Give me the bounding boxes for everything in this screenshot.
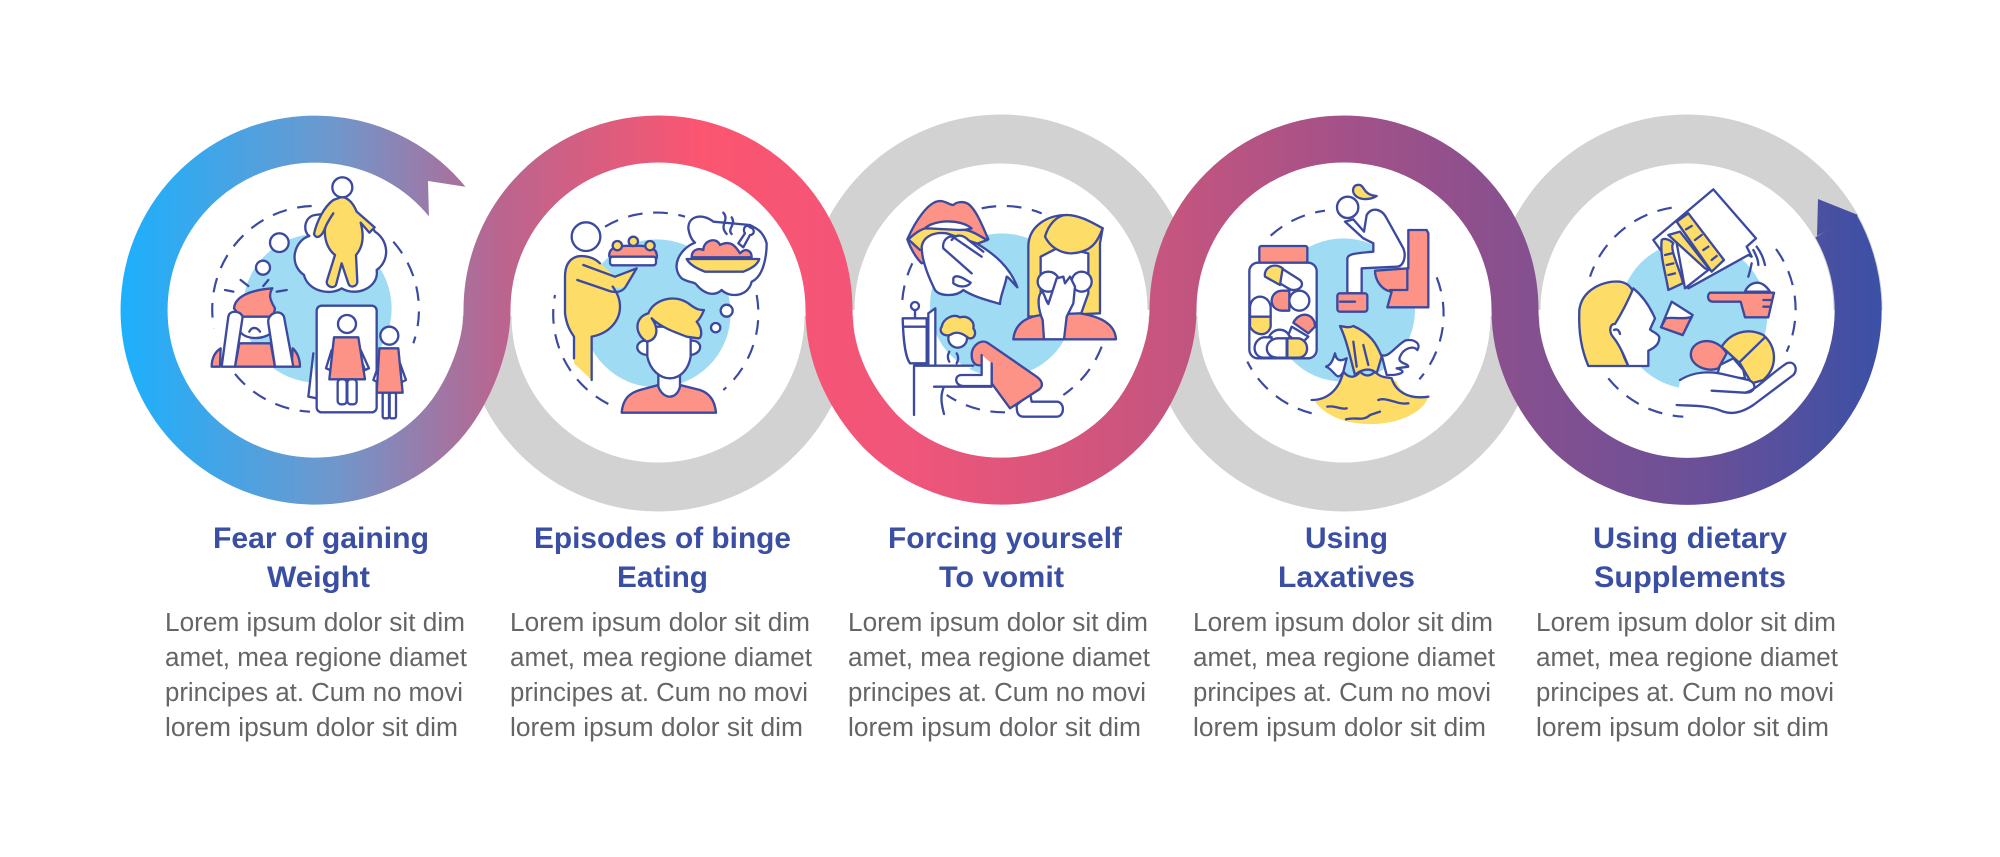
text block: description: Lorem ipsum dolor sit dim [1193,609,1493,637]
panel: step 4 using laxatives [1193,185,1495,742]
panel: step 5 using dietary supplements [1536,189,1838,742]
heading: episodes of binge eating: Episodes of binge [534,522,791,555]
heading: episodes of binge eating: Eating [617,561,708,594]
panel: step 2 episodes of binge eating [510,213,812,742]
text block: description: principes at. Cum no movi [1536,679,1834,707]
text block: description: principes at. Cum no movi [1193,679,1491,707]
panel: step 3 forcing yourself to vomit [848,201,1150,742]
text block: description: amet, mea regione diamet [1536,644,1838,672]
text block: description: lorem ipsum dolor sit dim [848,714,1141,742]
icon: pill jar, person on toilet and liquid splash [1247,185,1444,424]
text block: description: Lorem ipsum dolor sit dim [165,609,465,637]
panel: step 1 fear of gaining weight [165,177,467,742]
text block: description: Lorem ipsum dolor sit dim [1536,609,1836,637]
heading: forcing yourself to vomit: To vomit [939,561,1064,594]
heading: using dietary supplements: Using dietary [1593,522,1787,555]
heading: using laxatives: Using [1305,522,1388,555]
icon: mouth, hand, woman and toilet [902,201,1116,417]
text block: description: Lorem ipsum dolor sit dim [848,609,1148,637]
heading: using dietary supplements: Supplements [1594,561,1786,594]
icon: girl, thought cloud and mirror [212,177,419,418]
text block: description: principes at. Cum no movi [510,679,808,707]
icon: woman, supplement box, scoop and pills in a hand [1579,189,1796,417]
heading: forcing yourself to vomit: Forcing yourself [888,522,1123,555]
text block: description: amet, mea regione diamet [848,644,1150,672]
text block: description: amet, mea regione diamet [510,644,812,672]
text block: description: Lorem ipsum dolor sit dim [510,609,810,637]
text block: description: principes at. Cum no movi [848,679,1146,707]
gradient ribbon with arrow head [144,139,1858,481]
text block: description: amet, mea regione diamet [165,644,467,672]
text block: description: lorem ipsum dolor sit dim [165,714,458,742]
heading: fear of gaining weight: Weight [267,561,370,594]
text block: description: amet, mea regione diamet [1193,644,1495,672]
grey background ring segments [487,139,1858,487]
text block: description: lorem ipsum dolor sit dim [1193,714,1486,742]
text block: description: lorem ipsum dolor sit dim [510,714,803,742]
heading: fear of gaining weight: Fear of gaining [213,522,429,555]
heading: using laxatives: Laxatives [1278,561,1415,594]
text block: description: principes at. Cum no movi [165,679,463,707]
text block: description: lorem ipsum dolor sit dim [1536,714,1829,742]
icon: eating figure and boy thinking of food [553,213,767,413]
